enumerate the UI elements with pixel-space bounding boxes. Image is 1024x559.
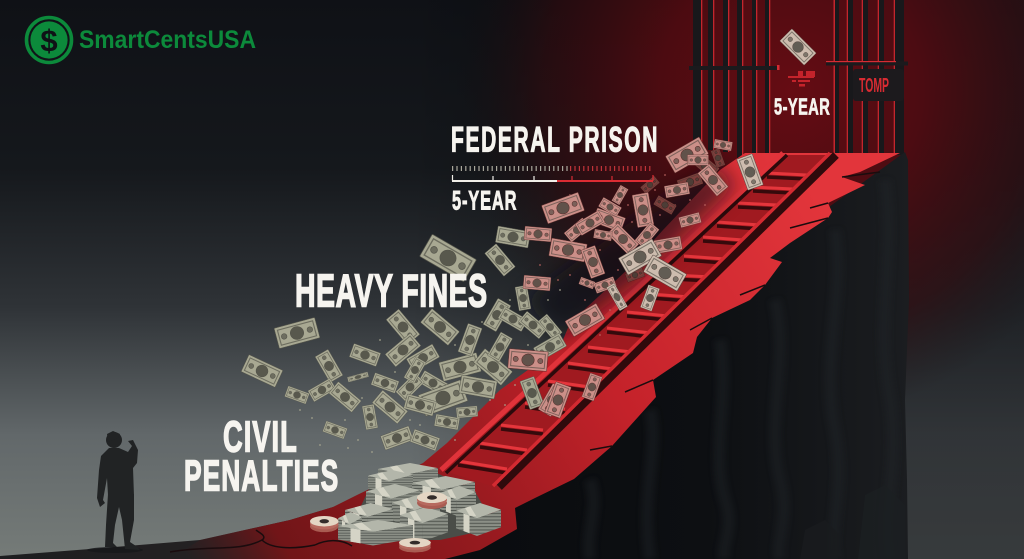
red sloped road (170, 153, 900, 559)
ladder rungs (458, 173, 807, 473)
dark pink particles (540, 175, 705, 335)
cracks (170, 172, 880, 552)
heading: Heavy Fines: HEAVY FINES (295, 266, 487, 317)
falling money: pink bills (508, 137, 733, 418)
ladder (441, 153, 836, 487)
dust particles (300, 290, 560, 452)
label: 5-year in prison: 5-YEAR (774, 94, 830, 121)
ladder rails (441, 153, 836, 487)
falling money: dark bills behind (625, 148, 725, 282)
heading: Civil Penalties: CIVIL (223, 412, 297, 461)
timeline scale (452, 168, 653, 181)
logo: SmartCentsUSA: $ (40, 23, 58, 58)
falling money: pale bills near ladder (606, 29, 816, 311)
ground (0, 505, 420, 559)
heading: Civil Penalties (184, 412, 338, 500)
logo: SmartCentsUSA: SmartCentsUSA (79, 26, 256, 54)
small red emblem (788, 71, 815, 86)
heading: Federal Prison: FEDERAL PRISON (451, 121, 657, 160)
silhouette man looking up (87, 431, 143, 553)
label: 5-year below scale: 5-YEAR (452, 185, 517, 216)
dark haze behind money (525, 165, 735, 340)
right gate bars (826, 0, 908, 160)
coins (310, 492, 447, 552)
sign: TOMP (853, 69, 904, 101)
prison gate (689, 0, 908, 162)
cliff (400, 152, 909, 559)
falling money: grey bills (241, 226, 567, 451)
cash pile (310, 463, 501, 552)
left gate bars (689, 0, 780, 162)
sign: TOMP: TOMP (859, 75, 889, 97)
heading: Civil Penalties: PENALTIES (184, 450, 338, 500)
logo: SmartCentsUSA (26, 18, 256, 62)
